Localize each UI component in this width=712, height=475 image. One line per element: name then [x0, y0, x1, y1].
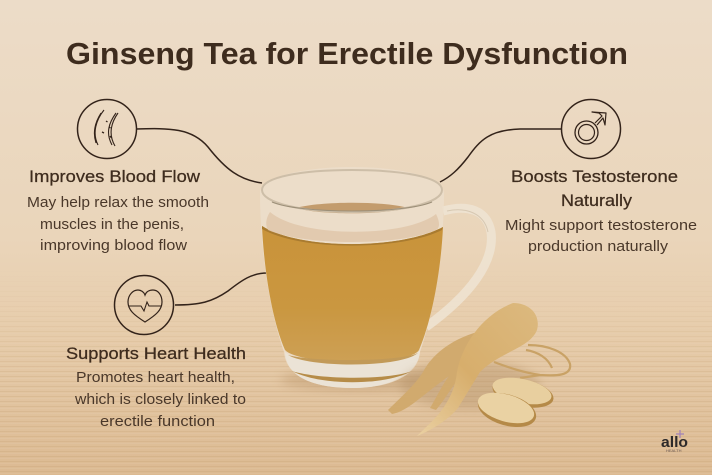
text: heart health description: erectile function [100, 414, 215, 430]
text: blood flow description: muscles in the penis, [40, 217, 184, 233]
illustration: ginseng root [388, 303, 570, 436]
logo: allo health: HEALTH [666, 448, 682, 453]
illustration: ginseng slices [474, 373, 556, 433]
text: heart health description [74, 370, 246, 430]
connector: blood flow [136, 129, 262, 183]
text: blood flow description: improving blood flow [40, 238, 188, 254]
text: testosterone description [505, 218, 697, 255]
text: heart health description: Promotes heart health, [76, 370, 235, 386]
heading: supports heart health: Supports Heart Health [66, 345, 246, 363]
text: testosterone description: production naturally [528, 239, 669, 255]
title: Ginseng Tea for Erectile Dysfunction [66, 36, 628, 71]
heading: boosts testosterone naturally: Naturally [561, 192, 633, 210]
heading: boosts testosterone naturally: Boosts Testosterone [511, 168, 678, 186]
text: blood flow description: May help relax the smooth [27, 195, 209, 211]
icon: blood vessel [78, 100, 136, 158]
illustration: glass mug of tea [260, 167, 491, 391]
heading: boosts testosterone naturally [511, 168, 678, 210]
connector: heart health [175, 273, 267, 305]
heading: improves blood flow: Improves Blood Flow [29, 168, 200, 186]
icon: male symbol [562, 100, 620, 158]
text: testosterone description: Might support testosterone [505, 218, 697, 234]
logo: allo health: allo [661, 434, 688, 451]
text: blood flow description [27, 195, 209, 254]
icon: heart with pulse [114, 276, 174, 334]
text: heart health description: which is closely linked to [74, 392, 246, 408]
wood table texture [0, 341, 712, 472]
connector: testosterone [440, 129, 562, 182]
